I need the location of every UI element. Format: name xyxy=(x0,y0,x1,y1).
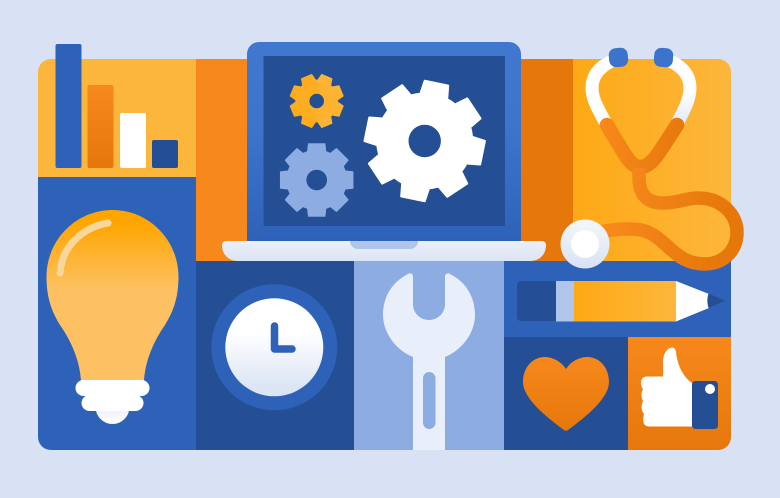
infographic illustration xyxy=(38,42,744,450)
icon: small yellow gear xyxy=(282,66,351,136)
icon: large white gear xyxy=(355,71,494,211)
icon: clock xyxy=(211,284,337,410)
panel: background card xyxy=(38,59,731,450)
icon: stethoscope xyxy=(560,47,737,268)
icon: light bulb xyxy=(46,210,178,424)
icon: pencil xyxy=(517,281,725,322)
laptop xyxy=(222,42,546,261)
icon: thumbs up xyxy=(641,348,718,429)
icon: wrench xyxy=(383,273,475,450)
icon: heart xyxy=(523,357,609,431)
bar chart xyxy=(56,44,178,168)
icon: blue gear xyxy=(281,144,353,216)
